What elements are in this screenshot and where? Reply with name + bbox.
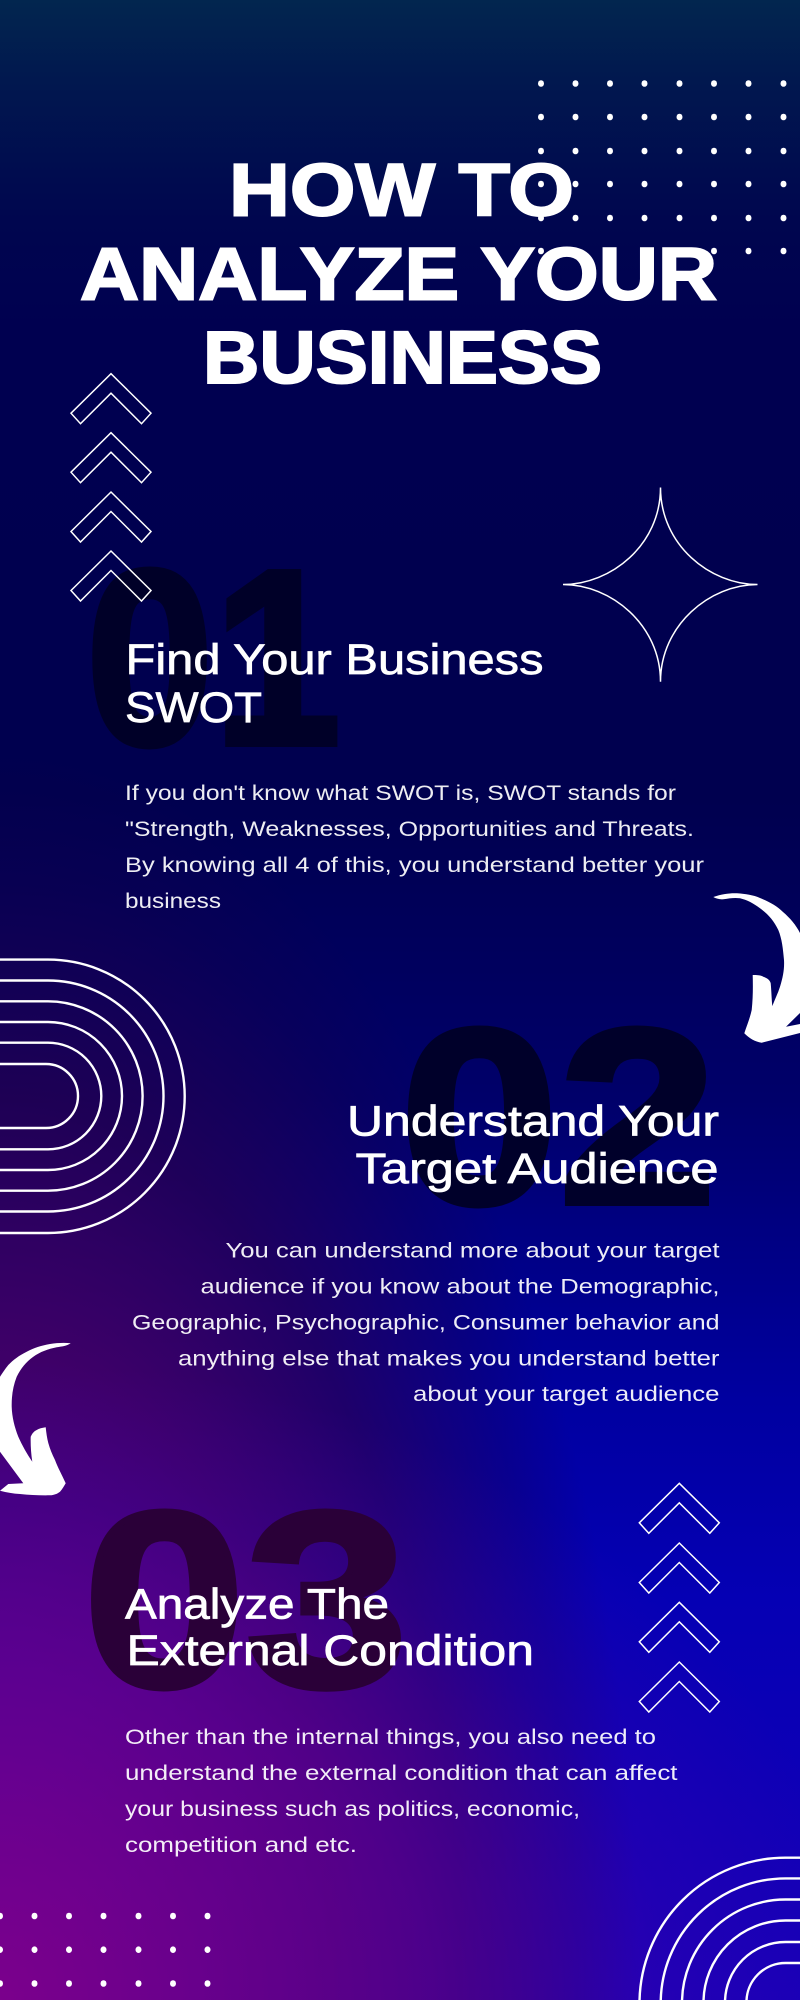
body text: SWOT explanation: business [125, 889, 221, 913]
title: ANALYZE YOUR [80, 232, 717, 316]
heading: analyze the external condition [125, 1580, 534, 1675]
body text: target audience explanation [132, 1238, 720, 1406]
icon: chevrons up, left [71, 374, 151, 601]
title: BUSINESS [203, 316, 602, 399]
panel: step 1 find your business SWOT [86, 518, 704, 913]
body text: target audience explanation: about your target audience [413, 1382, 720, 1406]
number 03: 03 [83, 1460, 408, 1739]
panel: step 3 analyze the external condition [83, 1460, 678, 1857]
body text: target audience explanation: audience if you know about the Demographic, [200, 1274, 720, 1298]
heading: analyze the external condition: External Condition [126, 1627, 534, 1675]
icon: four-point star outline [563, 488, 758, 682]
body text: external condition explanation: understand the external condition that can affect [125, 1761, 678, 1785]
panel: step 2 understand your target audience [132, 977, 720, 1406]
heading: find your business SWOT: Find Your Business [126, 636, 544, 684]
body text: SWOT explanation: If you don't know what SWOT is, SWOT stands for [125, 781, 676, 805]
body text: SWOT explanation: By knowing all 4 of this, you understand better your [125, 853, 704, 877]
icon: concentric arches, bottom right [640, 1858, 800, 2000]
heading: understand your target audience: Understand Your [347, 1098, 719, 1146]
heading: analyze the external condition: Analyze The [125, 1580, 389, 1628]
icon: concentric arches, left [0, 960, 185, 1233]
body text: target audience explanation: You can understand more about your target [226, 1238, 720, 1262]
heading: understand your target audience [347, 1098, 719, 1193]
title [80, 148, 717, 399]
number 01: 01 [86, 518, 341, 797]
body text: external condition explanation: Other than the internal things, you also need to [125, 1725, 656, 1749]
body text: external condition explanation: competition and etc. [125, 1833, 357, 1857]
body text: target audience explanation: Geographic, Psychographic, Consumer behavior and [132, 1310, 720, 1334]
body text: target audience explanation: anything else that makes you understand better [178, 1346, 720, 1370]
icon: chevrons up, right [639, 1483, 719, 1712]
title: HOW TO [229, 148, 574, 232]
number 02: 02 [400, 977, 717, 1256]
decorative dot grid: top right [538, 80, 786, 254]
decorative dot grid: bottom left [0, 1913, 210, 1987]
arrow: curved, left edge pointing down [0, 1343, 71, 1495]
heading: find your business SWOT: SWOT [125, 684, 262, 732]
body text: external condition explanation [125, 1725, 678, 1857]
arrow: curved, right edge pointing down [713, 893, 800, 1043]
heading: find your business SWOT [125, 636, 544, 732]
heading: understand your target audience: Target Audience [356, 1145, 718, 1193]
body text: SWOT explanation: "Strength, Weaknesses, Opportunities and Threats. [125, 817, 694, 841]
body text: SWOT explanation [125, 781, 704, 913]
body text: external condition explanation: your business such as politics, economic, [125, 1797, 580, 1821]
